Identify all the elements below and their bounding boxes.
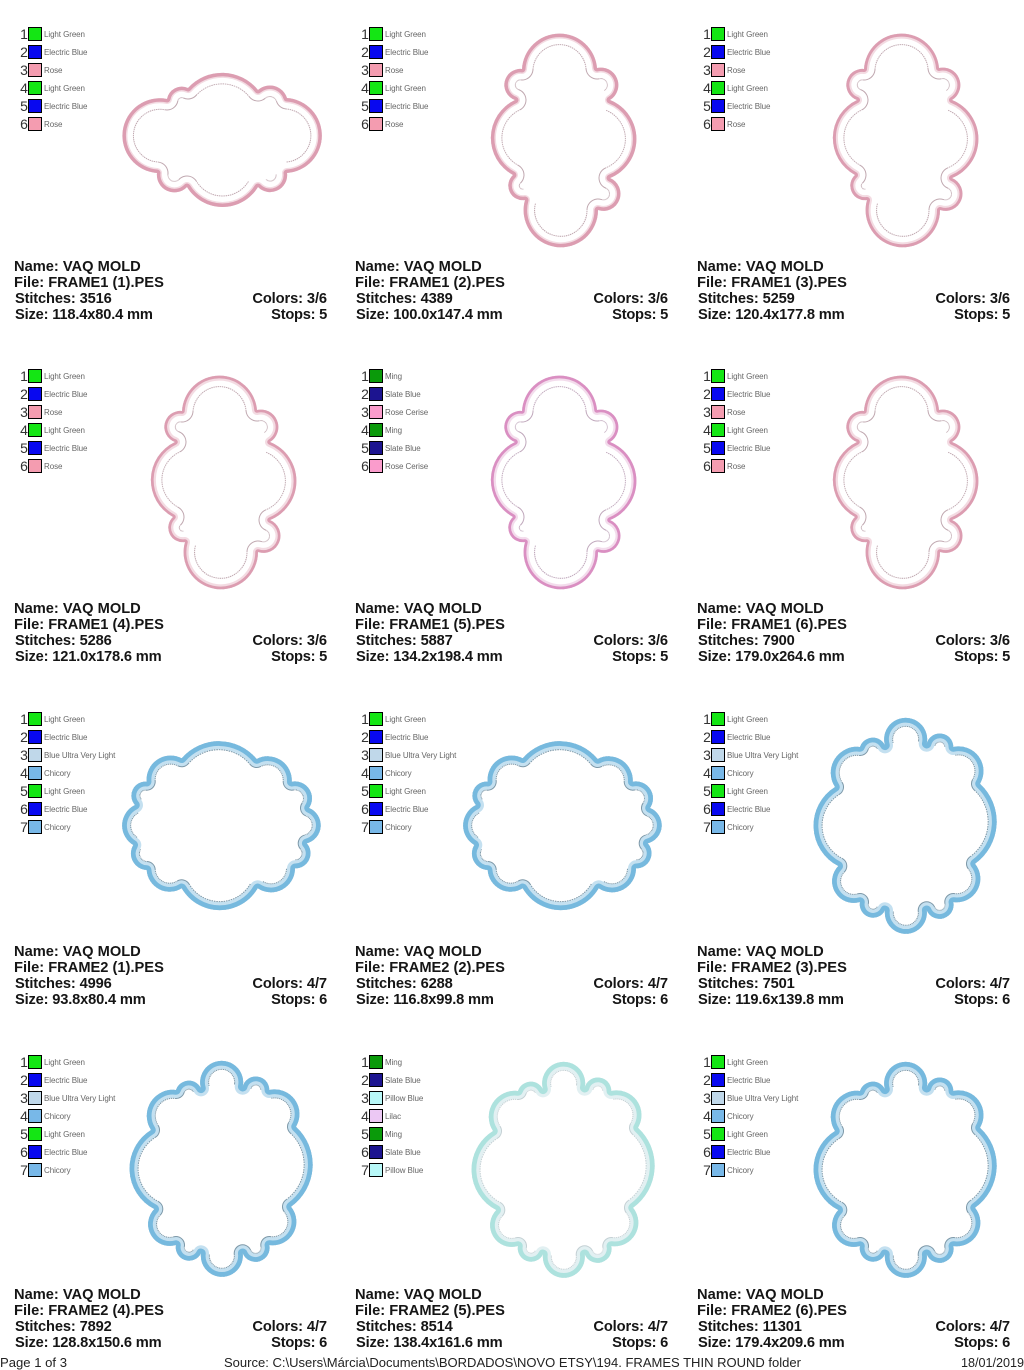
colour legend xyxy=(703,1054,799,1178)
colour legend: Slate Blue xyxy=(385,1076,421,1085)
colour legend: Slate Blue xyxy=(385,390,421,399)
colour legend: 7 xyxy=(20,819,28,835)
design details: Size: 121.0x178.6 mm xyxy=(15,649,162,665)
colour legend xyxy=(703,26,771,132)
colour legend: Rose Cerise xyxy=(385,408,429,417)
colour legend: Rose xyxy=(385,120,404,129)
colour legend: 6 xyxy=(20,1144,28,1160)
design details: Size: 138.4x161.6 mm xyxy=(356,1335,503,1351)
colour legend: 6 xyxy=(20,116,28,132)
panel: FRAME2 (1) xyxy=(14,711,327,1008)
design details: Stops: 6 xyxy=(612,1335,668,1351)
frame outline: pale aqua tall scallop xyxy=(472,1062,655,1278)
colour legend xyxy=(20,711,116,835)
design details: File: FRAME2 (3).PES xyxy=(697,960,847,976)
colour legend: Electric Blue xyxy=(44,444,88,453)
colour legend: 5 xyxy=(703,440,711,456)
colour legend: Light Green xyxy=(727,715,768,724)
colour legend: Light Green xyxy=(727,1058,768,1067)
colour legend: 3 xyxy=(20,404,28,420)
colour legend: 5 xyxy=(361,440,369,456)
design details xyxy=(355,944,668,1008)
colour legend: 3 xyxy=(361,747,369,763)
panel: FRAME1 (1) xyxy=(14,26,327,323)
colour legend: 1 xyxy=(361,26,369,42)
design details xyxy=(14,259,327,323)
design details: Colors: 3/6 xyxy=(935,633,1010,649)
design details: File: FRAME1 (3).PES xyxy=(697,275,847,291)
colour legend: 4 xyxy=(703,1108,711,1124)
colour legend: Light Green xyxy=(385,84,426,93)
colour legend: 1 xyxy=(703,711,711,727)
colour legend: 7 xyxy=(361,819,369,835)
colour legend: Electric Blue xyxy=(385,733,429,742)
design details: Colors: 4/7 xyxy=(935,1319,1010,1335)
design details: Colors: 4/7 xyxy=(593,976,668,992)
design details: File: FRAME1 (2).PES xyxy=(355,275,505,291)
colour legend: 2 xyxy=(20,44,28,60)
colour legend: Electric Blue xyxy=(727,102,771,111)
colour legend: Blue Ultra Very Light xyxy=(385,751,457,760)
colour legend: 2 xyxy=(703,1072,711,1088)
design details: Stops: 6 xyxy=(612,992,668,1008)
colour legend: 2 xyxy=(20,1072,28,1088)
colour legend: Ming xyxy=(385,1130,402,1139)
colour legend: 4 xyxy=(20,1108,28,1124)
design details: Stops: 5 xyxy=(271,307,327,323)
design details: Colors: 4/7 xyxy=(252,976,327,992)
colour legend: 5 xyxy=(20,98,28,114)
design details: File: FRAME1 (1).PES xyxy=(14,275,164,291)
colour legend: 5 xyxy=(361,783,369,799)
frame outline: pink tall cloud xyxy=(833,376,978,589)
colour legend: Light Green xyxy=(385,787,426,796)
design details xyxy=(697,1287,1010,1351)
design details: Stops: 5 xyxy=(954,307,1010,323)
design details: Colors: 3/6 xyxy=(593,291,668,307)
colour legend: 5 xyxy=(703,98,711,114)
frame outline: pink tall cloud xyxy=(833,34,978,247)
colour legend: Rose xyxy=(727,462,746,471)
design details: Size: 120.4x177.8 mm xyxy=(698,307,845,323)
colour legend: Light Green xyxy=(44,84,85,93)
panel: FRAME1 (4) xyxy=(14,368,327,665)
colour legend: 7 xyxy=(703,819,711,835)
colour legend: Electric Blue xyxy=(727,390,771,399)
design details: Size: 179.4x209.6 mm xyxy=(698,1335,845,1351)
colour legend xyxy=(361,711,457,835)
panel: FRAME2 (4) xyxy=(14,1054,327,1351)
colour legend: Chicory xyxy=(727,823,754,832)
colour legend xyxy=(361,368,429,474)
colour legend: Chicory xyxy=(44,1166,71,1175)
colour legend: 3 xyxy=(703,404,711,420)
page footer: 18/01/2019 xyxy=(961,1356,1024,1370)
colour legend: 2 xyxy=(361,1072,369,1088)
design details: File: FRAME2 (4).PES xyxy=(14,1303,164,1319)
design details: File: FRAME2 (1).PES xyxy=(14,960,164,976)
colour legend: 2 xyxy=(20,386,28,402)
panel: FRAME2 (2) xyxy=(355,711,668,1008)
colour legend: Ming xyxy=(385,1058,402,1067)
design details xyxy=(355,259,668,323)
colour legend: 3 xyxy=(703,747,711,763)
colour legend: Electric Blue xyxy=(44,48,88,57)
design details: Name: VAQ MOLD xyxy=(14,259,141,275)
panel: FRAME2 (5) xyxy=(355,1054,668,1351)
colour legend xyxy=(703,368,771,474)
design details: Stitches: 5259 xyxy=(698,291,795,307)
colour legend: 7 xyxy=(361,1162,369,1178)
colour legend xyxy=(361,1054,424,1178)
colour legend: 4 xyxy=(20,80,28,96)
design details: Stitches: 4389 xyxy=(356,291,453,307)
colour legend: 6 xyxy=(361,116,369,132)
colour legend: 4 xyxy=(361,422,369,438)
colour legend: Electric Blue xyxy=(385,805,429,814)
design details xyxy=(697,944,1010,1008)
colour legend: Rose xyxy=(44,66,63,75)
design details: Name: VAQ MOLD xyxy=(355,601,482,617)
design details: Colors: 3/6 xyxy=(252,633,327,649)
colour legend: 1 xyxy=(703,26,711,42)
frame outline: pink tall cloud xyxy=(151,376,296,589)
design details: Size: 179.0x264.6 mm xyxy=(698,649,845,665)
colour legend: Pillow Blue xyxy=(385,1166,424,1175)
colour legend: Chicory xyxy=(385,823,412,832)
colour legend: Electric Blue xyxy=(727,733,771,742)
design details: File: FRAME2 (6).PES xyxy=(697,1303,847,1319)
colour legend: Electric Blue xyxy=(385,102,429,111)
colour legend: Electric Blue xyxy=(44,102,88,111)
colour legend: 6 xyxy=(20,458,28,474)
colour legend: Light Green xyxy=(727,426,768,435)
colour legend: Electric Blue xyxy=(727,1148,771,1157)
colour legend: Chicory xyxy=(385,769,412,778)
colour legend: 3 xyxy=(361,62,369,78)
colour legend: Light Green xyxy=(727,30,768,39)
colour legend: Electric Blue xyxy=(727,48,771,57)
colour legend: Rose xyxy=(385,66,404,75)
colour legend: 4 xyxy=(703,80,711,96)
colour legend: Light Green xyxy=(385,715,426,724)
design details: Colors: 3/6 xyxy=(593,633,668,649)
page footer: Source: C:\Users\Márcia\Documents\BORDADOS\NOVO ETSY\194. FRAMES THIN ROUND folder xyxy=(224,1356,801,1370)
colour legend: Rose xyxy=(727,120,746,129)
colour legend: 5 xyxy=(361,98,369,114)
design details: Stops: 6 xyxy=(271,992,327,1008)
design details xyxy=(14,601,327,665)
colour legend: 3 xyxy=(703,62,711,78)
design details: File: FRAME1 (6).PES xyxy=(697,617,847,633)
colour legend: 6 xyxy=(20,801,28,817)
panel: FRAME2 (3) xyxy=(697,711,1010,1008)
design details: Colors: 3/6 xyxy=(252,291,327,307)
colour legend: Rose xyxy=(727,66,746,75)
design details: Colors: 4/7 xyxy=(593,1319,668,1335)
design details: Name: VAQ MOLD xyxy=(14,601,141,617)
design details: Size: 100.0x147.4 mm xyxy=(356,307,503,323)
frame outline: pink cloud xyxy=(122,73,322,207)
colour legend: 6 xyxy=(703,458,711,474)
frame outline: rose-cerise tall cloud xyxy=(491,376,636,589)
design details: Stitches: 5286 xyxy=(15,633,112,649)
colour legend: Blue Ultra Very Light xyxy=(44,751,116,760)
colour legend xyxy=(703,711,799,835)
colour legend: 3 xyxy=(703,1090,711,1106)
panel: FRAME1 (6) xyxy=(697,368,1010,665)
frame outline: blue tall scallop xyxy=(814,1062,997,1278)
design details xyxy=(697,601,1010,665)
colour legend: Chicory xyxy=(727,1166,754,1175)
design details: Stitches: 11301 xyxy=(698,1319,802,1335)
colour legend: Blue Ultra Very Light xyxy=(727,751,799,760)
colour legend: Electric Blue xyxy=(727,805,771,814)
design details: Size: 119.6x139.8 mm xyxy=(698,992,844,1008)
colour legend: 6 xyxy=(361,801,369,817)
panel: FRAME1 (5) xyxy=(355,368,668,665)
panel: FRAME1 (2) xyxy=(355,26,668,323)
panel: FRAME1 (3) xyxy=(697,26,1010,323)
colour legend: Light Green xyxy=(44,1058,85,1067)
colour legend: 4 xyxy=(703,765,711,781)
colour legend: 5 xyxy=(20,783,28,799)
colour legend: Light Green xyxy=(727,1130,768,1139)
colour legend: Blue Ultra Very Light xyxy=(44,1094,116,1103)
design details xyxy=(355,1287,668,1351)
page footer xyxy=(0,1356,1024,1370)
colour legend: Electric Blue xyxy=(727,444,771,453)
design details: Size: 128.8x150.6 mm xyxy=(15,1335,162,1351)
colour legend: 2 xyxy=(361,44,369,60)
design details: Stitches: 7900 xyxy=(698,633,795,649)
design details: Stops: 5 xyxy=(271,649,327,665)
frame outline: pink tall cloud xyxy=(491,34,636,247)
colour legend: Light Green xyxy=(44,426,85,435)
colour legend: 5 xyxy=(20,440,28,456)
design details: Stops: 5 xyxy=(612,649,668,665)
colour legend: 6 xyxy=(703,1144,711,1160)
panel: FRAME2 (6) xyxy=(697,1054,1010,1351)
design details: Name: VAQ MOLD xyxy=(697,259,824,275)
design details: Colors: 4/7 xyxy=(935,976,1010,992)
colour legend xyxy=(361,26,429,132)
colour legend: 6 xyxy=(361,458,369,474)
colour legend: 1 xyxy=(20,26,28,42)
colour legend: Rose xyxy=(44,462,63,471)
frame outline: blue tall scallop xyxy=(814,718,997,934)
colour legend: Rose xyxy=(727,408,746,417)
colour legend: 1 xyxy=(361,711,369,727)
colour legend: Slate Blue xyxy=(385,444,421,453)
design details: Stops: 6 xyxy=(271,1335,327,1351)
design details: Name: VAQ MOLD xyxy=(697,1287,824,1303)
design details: Stops: 6 xyxy=(954,992,1010,1008)
design details: Stops: 5 xyxy=(612,307,668,323)
colour legend: 1 xyxy=(20,1054,28,1070)
design details: File: FRAME2 (2).PES xyxy=(355,960,505,976)
colour legend: 7 xyxy=(703,1162,711,1178)
colour legend: Rose xyxy=(44,120,63,129)
design details: Size: 118.4x80.4 mm xyxy=(15,307,153,323)
colour legend: Light Green xyxy=(727,84,768,93)
colour legend: 6 xyxy=(703,801,711,817)
colour legend: 3 xyxy=(361,1090,369,1106)
design details: Size: 93.8x80.4 mm xyxy=(15,992,146,1008)
colour legend: 6 xyxy=(361,1144,369,1160)
colour legend: Blue Ultra Very Light xyxy=(727,1094,799,1103)
colour legend: Rose Cerise xyxy=(385,462,429,471)
colour legend: 1 xyxy=(361,1054,369,1070)
colour legend: Chicory xyxy=(727,769,754,778)
page footer: Page 1 of 3 xyxy=(0,1356,67,1370)
colour legend: Light Green xyxy=(44,372,85,381)
design details: Name: VAQ MOLD xyxy=(14,1287,141,1303)
colour legend: Chicory xyxy=(44,769,71,778)
colour legend: 1 xyxy=(20,368,28,384)
colour legend: Electric Blue xyxy=(44,390,88,399)
colour legend: 2 xyxy=(703,44,711,60)
colour legend: Light Green xyxy=(727,787,768,796)
design details: File: FRAME2 (5).PES xyxy=(355,1303,505,1319)
colour legend: Electric Blue xyxy=(385,48,429,57)
colour legend: 3 xyxy=(361,404,369,420)
colour legend: Light Green xyxy=(44,30,85,39)
colour legend: 4 xyxy=(361,765,369,781)
colour legend: Light Green xyxy=(44,715,85,724)
colour legend: 5 xyxy=(20,1126,28,1142)
design details: Stops: 6 xyxy=(954,1335,1010,1351)
colour legend: Light Green xyxy=(44,1130,85,1139)
colour legend: 1 xyxy=(20,711,28,727)
colour legend: Chicory xyxy=(727,1112,754,1121)
colour legend: Electric Blue xyxy=(44,1076,88,1085)
colour legend: Ming xyxy=(385,372,402,381)
design details: Name: VAQ MOLD xyxy=(355,259,482,275)
colour legend: 2 xyxy=(361,729,369,745)
design details: File: FRAME1 (5).PES xyxy=(355,617,505,633)
colour legend: Electric Blue xyxy=(44,805,88,814)
design details: Stitches: 7892 xyxy=(15,1319,112,1335)
colour legend: Electric Blue xyxy=(44,1148,88,1157)
colour legend: 2 xyxy=(361,386,369,402)
design details: Name: VAQ MOLD xyxy=(355,1287,482,1303)
colour legend: 1 xyxy=(703,368,711,384)
design details: Name: VAQ MOLD xyxy=(697,944,824,960)
design details: Stops: 5 xyxy=(954,649,1010,665)
colour legend: 6 xyxy=(703,116,711,132)
colour legend: 2 xyxy=(20,729,28,745)
colour legend: Rose xyxy=(44,408,63,417)
colour legend: Electric Blue xyxy=(727,1076,771,1085)
colour legend: Light Green xyxy=(385,30,426,39)
design details: Size: 134.2x198.4 mm xyxy=(356,649,503,665)
frame outline: blue scallop xyxy=(122,741,321,910)
design details: File: FRAME1 (4).PES xyxy=(14,617,164,633)
design details: Colors: 3/6 xyxy=(935,291,1010,307)
colour legend: Chicory xyxy=(44,823,71,832)
colour legend: Electric Blue xyxy=(44,733,88,742)
colour legend: 4 xyxy=(703,422,711,438)
colour legend: 3 xyxy=(20,62,28,78)
design details xyxy=(14,944,327,1008)
design details: Name: VAQ MOLD xyxy=(14,944,141,960)
design details xyxy=(697,259,1010,323)
colour legend: 5 xyxy=(361,1126,369,1142)
design details: Stitches: 5887 xyxy=(356,633,453,649)
colour legend: Chicory xyxy=(44,1112,71,1121)
design details: Stitches: 7501 xyxy=(698,976,795,992)
colour legend: 2 xyxy=(703,729,711,745)
design details: Name: VAQ MOLD xyxy=(697,601,824,617)
colour legend: Light Green xyxy=(44,787,85,796)
colour legend: 7 xyxy=(20,1162,28,1178)
colour legend xyxy=(20,1054,116,1178)
frame outline: blue scallop xyxy=(463,741,662,910)
colour legend: 5 xyxy=(703,1126,711,1142)
colour legend: Lilac xyxy=(385,1112,401,1121)
design details: Name: VAQ MOLD xyxy=(355,944,482,960)
colour legend: 1 xyxy=(703,1054,711,1070)
colour legend xyxy=(20,26,88,132)
colour legend: 3 xyxy=(20,747,28,763)
design details: Size: 116.8x99.8 mm xyxy=(356,992,494,1008)
colour legend: Light Green xyxy=(727,372,768,381)
colour legend: Slate Blue xyxy=(385,1148,421,1157)
design details: Colors: 4/7 xyxy=(252,1319,327,1335)
design details: Stitches: 8514 xyxy=(356,1319,454,1335)
colour legend: 4 xyxy=(361,1108,369,1124)
design details: Stitches: 3516 xyxy=(15,291,112,307)
colour legend: 1 xyxy=(361,368,369,384)
colour legend: 4 xyxy=(20,765,28,781)
colour legend: 3 xyxy=(20,1090,28,1106)
colour legend: 5 xyxy=(703,783,711,799)
colour legend: 2 xyxy=(703,386,711,402)
colour legend: 4 xyxy=(361,80,369,96)
design details xyxy=(14,1287,327,1351)
design details: Stitches: 4996 xyxy=(15,976,112,992)
colour legend xyxy=(20,368,88,474)
colour legend: Ming xyxy=(385,426,402,435)
colour legend: Pillow Blue xyxy=(385,1094,424,1103)
design details: Stitches: 6288 xyxy=(356,976,453,992)
colour legend: 4 xyxy=(20,422,28,438)
design details xyxy=(355,601,668,665)
frame outline: blue tall scallop xyxy=(130,1061,313,1277)
